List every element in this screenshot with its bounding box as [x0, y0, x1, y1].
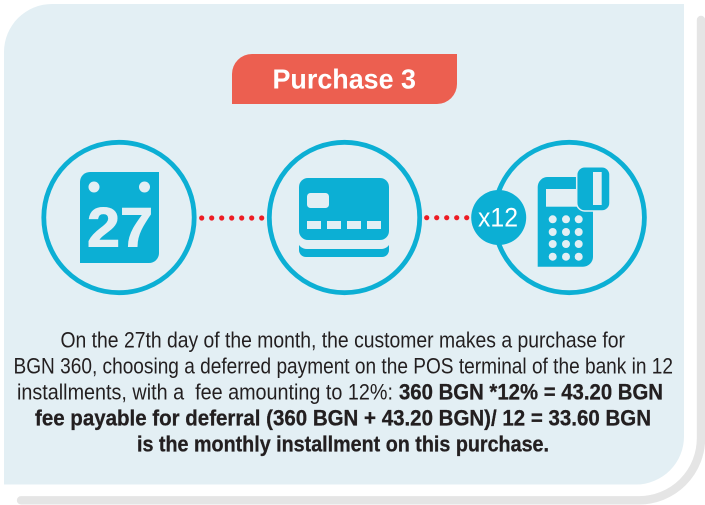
title tab [232, 54, 457, 104]
description text block: fee payable for deferral (360 BGN + 43.20 BGN)/ 12 = 33.60 BGN [35, 406, 651, 430]
description text block: installments, with a fee amounting to 12%: [17, 380, 393, 404]
description text block: is the monthly installment on this purchase. [137, 432, 549, 456]
badge: x12 installments [471, 190, 526, 245]
title text: Purchase 3 [272, 64, 416, 94]
description text block [14, 328, 673, 456]
calendar date: 27 [87, 196, 153, 258]
badge: x12 installments: x12 [478, 203, 518, 233]
icon: POS terminal in circle [494, 142, 644, 293]
description text block: 360 BGN *12% = 43.20 BGN [399, 380, 663, 404]
description text block: On the 27th day of the month, the customer makes a purchase for [60, 328, 625, 352]
icon: bank card in circle [269, 142, 420, 293]
icon: calendar in circle [44, 142, 194, 293]
connector dots: calendar to card [199, 215, 264, 221]
connector dots: card to installments [424, 215, 469, 220]
